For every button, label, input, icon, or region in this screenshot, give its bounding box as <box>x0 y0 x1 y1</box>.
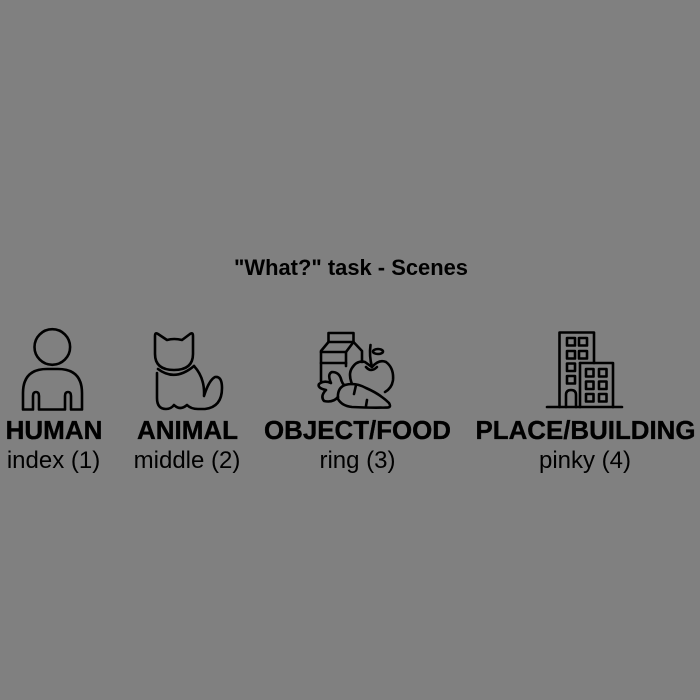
icon: building <box>547 332 622 407</box>
label: pinky finger: pinky (4) <box>539 447 631 474</box>
panel: animal <box>134 333 240 474</box>
label: index finger: index (1) <box>7 447 100 474</box>
icon: food <box>319 333 393 408</box>
icon: human <box>23 329 82 410</box>
heading: place/building: PLACE/BUILDING <box>476 415 696 445</box>
heading: object/food: OBJECT/FOOD <box>264 415 451 445</box>
icon: cat <box>155 333 222 409</box>
panel: place/building <box>476 332 696 474</box>
title: "What?" task - Scenes <box>234 255 468 280</box>
label: middle finger: middle (2) <box>134 447 240 474</box>
heading: human: HUMAN <box>6 415 102 445</box>
heading: animal: ANIMAL <box>137 415 238 445</box>
panel: object/food <box>264 333 451 474</box>
label: ring finger: ring (3) <box>319 447 396 474</box>
panel: human <box>6 329 102 474</box>
